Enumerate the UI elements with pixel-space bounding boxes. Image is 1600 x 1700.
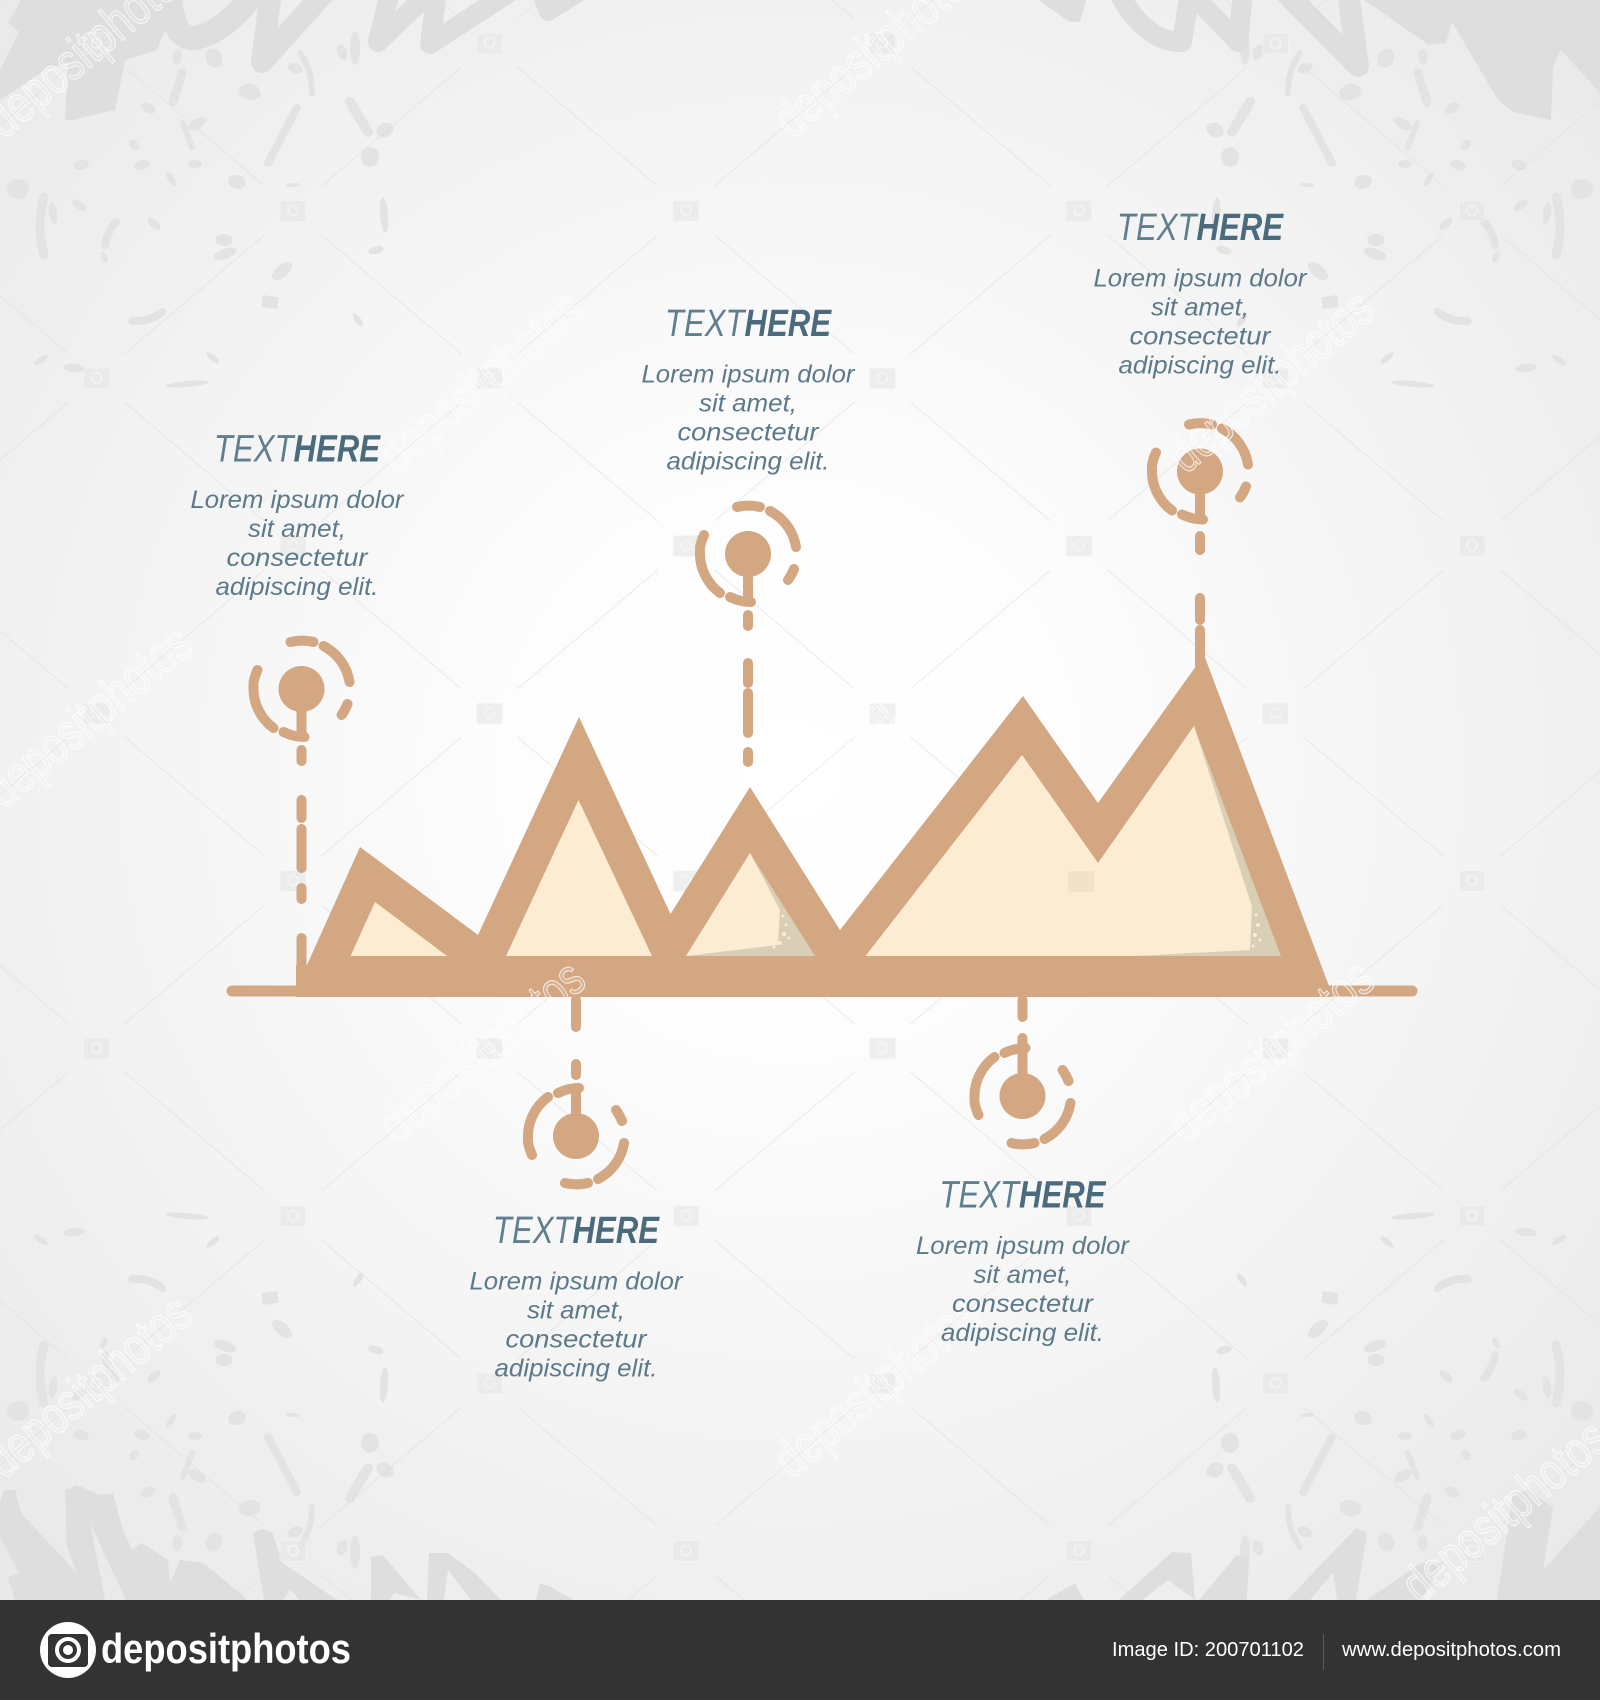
text block 3: adipiscing elit. <box>1118 352 1282 380</box>
text block 4: Lorem ipsum dolor <box>470 1268 684 1296</box>
text block 4: TEXTHERE <box>493 1210 661 1252</box>
text block 1: Lorem ipsum dolor <box>190 486 405 514</box>
text block 2: TEXTHERE <box>665 303 833 345</box>
text block 4: consectetur <box>506 1326 648 1354</box>
logo wordmark: depositphotos <box>101 1625 351 1672</box>
mountain outline <box>296 655 1332 997</box>
text block 1: adipiscing elit. <box>215 573 379 601</box>
text block 5 <box>916 1175 1131 1347</box>
text block 5: TEXTHERE <box>939 1175 1107 1216</box>
pin 1 <box>253 641 350 985</box>
text block 5: consectetur <box>952 1290 1095 1318</box>
text block 3: sit amet, <box>1151 294 1249 322</box>
chart baseline <box>232 986 1412 996</box>
text block 3: Lorem ipsum dolor <box>1094 264 1308 292</box>
peak fill 2 <box>506 800 652 956</box>
text block 2 <box>642 303 856 476</box>
icon: camera logo <box>40 1622 96 1678</box>
text block 4: sit amet, <box>527 1296 625 1324</box>
peak fill 1 <box>350 902 447 956</box>
text block 4: adipiscing elit. <box>494 1354 658 1382</box>
website: www.depositphotos.com <box>1341 1639 1561 1661</box>
text block 1: TEXTHERE <box>214 429 382 470</box>
text block 2: Lorem ipsum dolor <box>642 360 856 388</box>
watermark text: depositphotos <box>1156 279 1385 484</box>
text block 1: sit amet, <box>248 515 346 543</box>
pin 4 <box>528 1000 624 1184</box>
watermark text: depositphotos <box>367 279 596 484</box>
pin 2 <box>700 506 796 762</box>
footer bar <box>0 1600 1600 1700</box>
text block 2: adipiscing elit. <box>666 448 830 476</box>
pin 5 <box>974 1000 1070 1144</box>
peak fill 3 with shadow <box>686 853 815 956</box>
text block 4 <box>470 1210 684 1382</box>
watermark text: depositphotos <box>1156 949 1385 1154</box>
text block 2: consectetur <box>678 418 820 446</box>
text block 2: sit amet, <box>699 390 797 418</box>
text block 1: consectetur <box>226 544 369 572</box>
text block 5: sit amet, <box>974 1261 1072 1289</box>
watermark text: depositphotos <box>367 949 596 1154</box>
text block 5: adipiscing elit. <box>941 1319 1104 1347</box>
watermark text: depositphotos <box>762 1284 991 1489</box>
image id: Image ID: 200701102 <box>1112 1639 1304 1661</box>
double peak fill with shadow <box>866 726 1281 956</box>
pin 3 <box>1152 423 1248 665</box>
watermark text: depositphotos <box>762 614 991 819</box>
text block 3: TEXTHERE <box>1117 207 1285 249</box>
mountain chart <box>232 655 1412 997</box>
text block 3: consectetur <box>1130 322 1272 350</box>
text block 3 <box>1094 207 1308 380</box>
text block 1 <box>190 429 405 601</box>
text block 5: Lorem ipsum dolor <box>916 1232 1131 1260</box>
